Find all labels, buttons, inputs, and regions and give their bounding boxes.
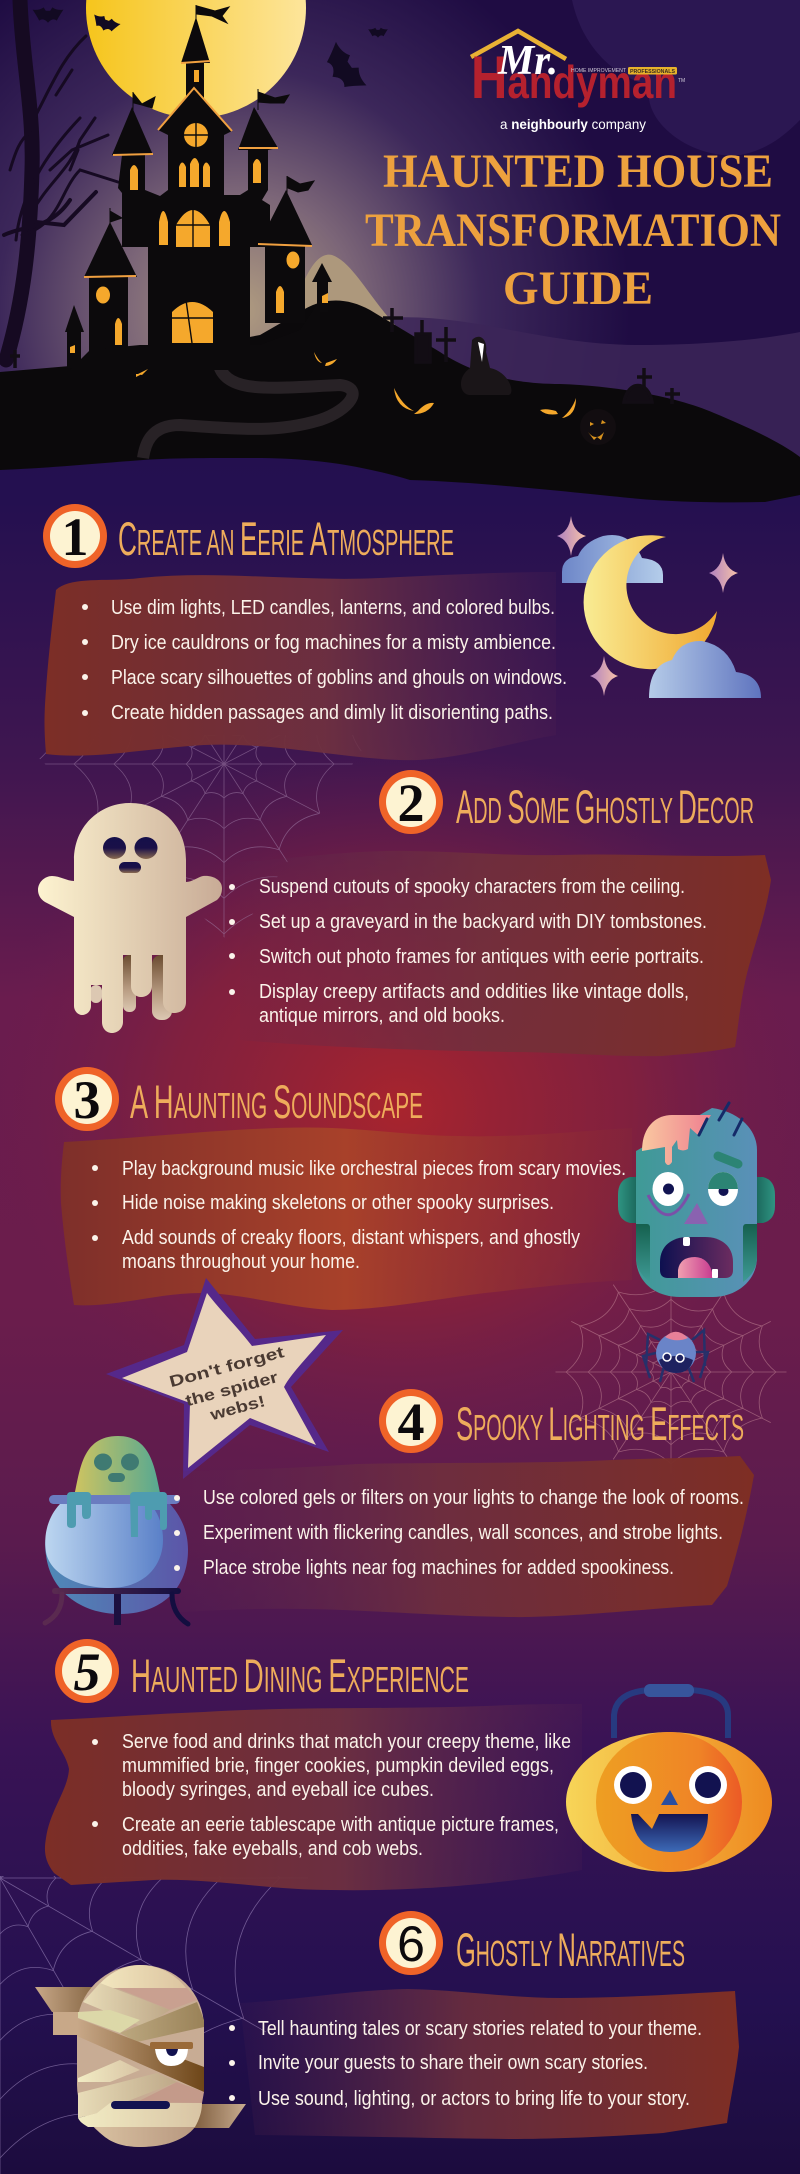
bullet list 2 [229, 876, 707, 1027]
icon: pumpkin bucket [566, 1684, 772, 1872]
black hill [0, 300, 800, 502]
bullet list 4: Experiment with flickering candles, wall sconces, and strobe lights. [203, 1522, 723, 1544]
icon: mummy [35, 1965, 246, 2147]
hero illustration: haunted house at night [0, 0, 800, 502]
star outer border [106, 1278, 343, 1479]
bullet list 1: Use dim lights, LED candles, lanterns, and colored bulbs. [111, 597, 555, 619]
carved pumpkin [580, 409, 616, 445]
bullet list 3 [92, 1158, 626, 1273]
mummy face [111, 2042, 193, 2109]
bullet list 5: oddities, fake eyeballs, and cob webs. [122, 1838, 423, 1860]
bullet list 2: Display creepy artifacts and oddities like vintage dolls, [259, 981, 689, 1003]
bullet list 4: Use colored gels or filters on your lights to change the look of rooms. [203, 1487, 744, 1509]
badge 1 [43, 504, 107, 568]
section 4: spooky lighting effects [45, 1389, 754, 1625]
zombie bruise [648, 1194, 689, 1215]
bullet list 4 [174, 1487, 744, 1579]
section 3: a haunting soundscape [55, 1067, 775, 1382]
star note text: Don't forget [168, 1344, 287, 1391]
dusk clouds [290, 0, 800, 470]
bare tree [4, 0, 118, 360]
bullet list 3: Add sounds of creaky floors, distant whispers, and ghostly [122, 1227, 580, 1249]
bullet list 5: Serve food and drinks that match your creepy theme, like [122, 1731, 571, 1753]
bullet list 6 [229, 2018, 702, 2110]
badge 3 [55, 1067, 119, 1131]
section 5: haunted dining experience [45, 1639, 772, 1890]
icon: cauldron with ghost [45, 1436, 188, 1625]
bullet list 6: Invite your guests to share their own scary stories. [258, 2052, 648, 2074]
bullet list 5: bloody syringes, and eyeball ice cubes. [122, 1779, 434, 1801]
castle silhouette [65, 17, 332, 370]
panel 3 background [61, 1128, 632, 1310]
title: HAUNTED HOUSE [383, 145, 773, 198]
panel 1 background [44, 572, 556, 760]
bullet list 3: moans throughout your home. [122, 1251, 360, 1273]
star note text: the spider [184, 1369, 280, 1410]
panel 5 background [45, 1704, 582, 1890]
logo script Mr.: Mr. [497, 38, 558, 84]
bullet list 1 [82, 597, 567, 724]
parent company line: a neighbourly company [500, 116, 646, 132]
star note text: webs! [207, 1393, 267, 1424]
bullet list 1: Create hidden passages and dimly lit disorienting paths. [111, 702, 553, 724]
section 6: ghostly narratives [35, 1911, 739, 2147]
ghost face [103, 837, 158, 873]
badge 2: 2 [398, 773, 424, 833]
badge 5 [55, 1639, 119, 1703]
castle roof trim [84, 61, 312, 277]
cauldron rim [49, 1495, 180, 1504]
bullet list 1: Dry ice cauldrons or fog machines for a misty ambience. [111, 632, 556, 654]
bullet list 3: Play background music like orchestral pieces from scary movies. [122, 1158, 626, 1180]
bullet list 5 [92, 1731, 571, 1860]
Mr. Handyman logo [471, 31, 685, 132]
spider web right [556, 1271, 786, 1473]
zombie nose [684, 1203, 708, 1224]
cauldron stand [45, 1588, 188, 1625]
logo wordmark: Handyman [471, 44, 677, 111]
ghost back drips [90, 955, 172, 1020]
icon: ghost [38, 803, 222, 1033]
bullet list 6: Use sound, lighting, or actors to bring life to your story. [258, 2088, 690, 2110]
bullet list 1: Place scary silhouettes of goblins and ghouls on windows. [111, 667, 567, 689]
bullet list 3: Hide noise making skeletons or other spooky surprises. [122, 1192, 554, 1214]
star callout: don't forget the spider webs [106, 1278, 343, 1479]
heading 2: ADD SOME GHOSTLY DECOR [456, 780, 754, 833]
badge 3: 3 [74, 1070, 100, 1130]
panel 4 background [179, 1456, 754, 1617]
cauldron body [45, 1504, 188, 1614]
logo tagline: HOME IMPROVEMENT [571, 68, 626, 74]
zombie ears [618, 1177, 775, 1223]
gravestones and crosses [10, 308, 680, 404]
logo professionals tag: PROFESSIONALS [630, 69, 675, 75]
heading 1: CREATE AN EERIE ATMOSPHERE [118, 512, 454, 565]
crow on a post [461, 337, 511, 395]
lit windows [70, 70, 328, 353]
glowing eyes in the dark [136, 352, 576, 418]
zombie hair [699, 1103, 742, 1135]
cauldron ghost [74, 1436, 161, 1497]
full moon [86, 0, 306, 118]
bats [33, 7, 388, 99]
icon: crescent moon with clouds and stars [557, 516, 761, 698]
badge 4: 4 [398, 1392, 424, 1452]
badge 6: 6 [397, 1916, 425, 1972]
zombie head shape [636, 1108, 757, 1297]
zombie eyes [652, 1172, 738, 1206]
bullet list 5: mummified brie, finger cookies, pumpkin deviled eggs, [122, 1755, 554, 1777]
title [365, 145, 781, 315]
badge 1: 1 [62, 507, 88, 567]
heading 3: A HAUNTING SOUNDSCAPE [130, 1075, 423, 1128]
heading 5: HAUNTED DINING EXPERIENCE [131, 1649, 469, 1702]
badge 2 [379, 770, 443, 834]
star note text [168, 1344, 287, 1424]
badge 5: 5 [74, 1642, 100, 1702]
logo roof [471, 31, 566, 59]
star inner fill [122, 1293, 326, 1468]
window mullions [172, 123, 213, 343]
bullet list 2: Set up a graveyard in the backyard with DIY tombstones. [259, 911, 707, 933]
icon: zombie head [618, 1103, 775, 1297]
zombie jaw shading [636, 1224, 757, 1282]
title: GUIDE [503, 262, 653, 315]
mummy bandage flaps [35, 1987, 246, 2128]
zombie brow [718, 1156, 738, 1164]
section 1: create an eerie atmosphere [43, 504, 761, 760]
bullet list 2: Suspend cutouts of spooky characters from the ceiling. [259, 876, 685, 898]
bullet list 6: Tell haunting tales or scary stories related to your theme. [258, 2018, 702, 2040]
bullet list 2: antique mirrors, and old books. [259, 1005, 505, 1027]
slime drips [67, 1492, 167, 1537]
ghost body [38, 803, 222, 1033]
icon: spider [643, 1330, 708, 1382]
logo trademark: TM [678, 78, 685, 84]
bullet list 4: Place strobe lights near fog machines for added spookiness. [203, 1557, 674, 1579]
winding path on hill [143, 362, 353, 458]
heading 6: GHOSTLY NARRATIVES [456, 1923, 685, 1976]
bullet list 2: Switch out photo frames for antiques with eerie portraits. [259, 946, 704, 968]
badge 6 [379, 1911, 443, 1975]
spider web lower left corner [0, 1876, 272, 2174]
spider web upper left [40, 738, 362, 938]
zombie exposed brain [642, 1115, 711, 1165]
badge 4 [379, 1389, 443, 1453]
section 2: add some ghostly decor [38, 770, 771, 1056]
castle flags [110, 5, 314, 226]
panel 6 background [240, 1989, 739, 2139]
panel 2 background [240, 851, 771, 1056]
night sky glow [0, 0, 800, 485]
bullet list 5: Create an eerie tablescape with antique picture frames, [122, 1814, 559, 1836]
heading 4: SPOOKY LIGHTING EFFECTS [456, 1397, 744, 1450]
zombie mouth [660, 1237, 733, 1278]
mummy head and wraps [77, 1965, 204, 2147]
